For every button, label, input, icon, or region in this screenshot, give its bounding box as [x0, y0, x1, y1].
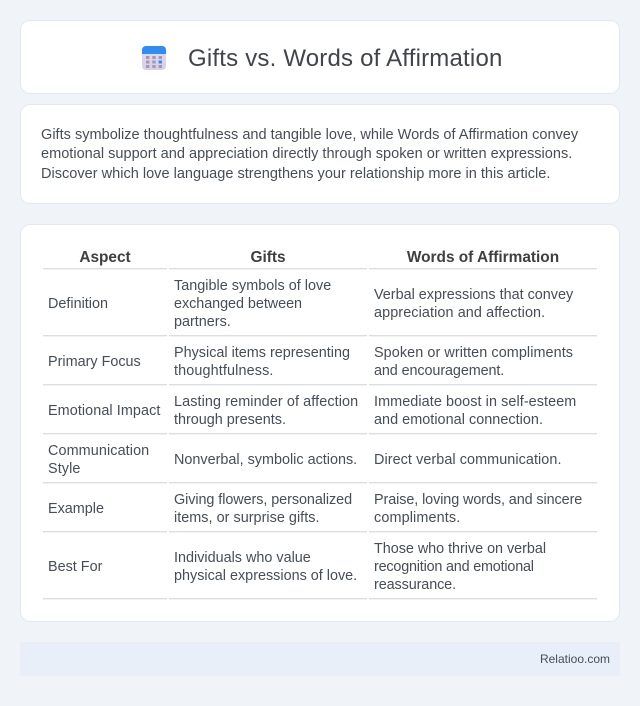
intro text	[41, 127, 578, 182]
row: primary focus: Physical items representing	[174, 345, 350, 361]
comparison table	[43, 249, 597, 600]
row: definition: appreciation and affection.	[374, 305, 545, 321]
row: best for: recognition and emotional	[374, 559, 534, 575]
row: best for: reassurance.	[374, 577, 456, 593]
row: communication style: Communication	[48, 443, 149, 459]
row: definition: Verbal expressions that convey	[374, 287, 573, 303]
header row	[43, 249, 597, 270]
row: communication style: Style	[48, 461, 80, 477]
row: best for	[43, 541, 597, 600]
row: emotional impact: Emotional Impact	[48, 403, 160, 419]
intro text: Gifts symbolize thoughtfulness and tangible love, while Words of Affirmation convey	[41, 127, 578, 143]
row: definition: exchanged between	[174, 296, 302, 312]
row: emotional impact: Immediate boost in self-esteem	[374, 394, 576, 410]
title: Gifts vs. Words of Affirmation	[188, 45, 503, 72]
header row: Words of Affirmation	[407, 249, 559, 266]
row: emotional impact: Lasting reminder of affection	[174, 394, 358, 410]
intro text: emotional support and appreciation directly through spoken or written expressions.	[41, 146, 572, 162]
row: primary focus: and encouragement.	[374, 363, 504, 379]
title card	[20, 20, 620, 94]
row: best for: Individuals who value	[174, 550, 311, 566]
row: example: Praise, loving words, and sincere	[374, 492, 582, 508]
row: emotional impact: through presents.	[174, 412, 286, 428]
row: definition: Tangible symbols of love	[174, 278, 331, 294]
table card	[20, 224, 620, 622]
row: primary focus: thoughtfulness.	[174, 363, 274, 379]
row: example: Giving flowers, personalized	[174, 492, 352, 508]
icon: calendar	[142, 46, 166, 70]
row: primary focus	[43, 345, 597, 386]
header row: Gifts	[250, 249, 286, 266]
row: communication style	[43, 443, 597, 484]
row: primary focus: Primary Focus	[48, 354, 141, 370]
row: example: compliments.	[374, 510, 460, 526]
row: best for: physical expressions of love.	[174, 568, 357, 584]
row: example: Example	[48, 501, 104, 517]
row: best for: Best For	[48, 559, 102, 575]
row: primary focus: Spoken or written compliments	[374, 345, 573, 361]
row: emotional impact: and emotional connection.	[374, 412, 543, 428]
row: example	[43, 492, 597, 533]
footer text: Relatioo.com	[540, 652, 610, 666]
row: communication style: Direct verbal communication.	[374, 452, 562, 468]
header row: Aspect	[79, 249, 131, 266]
footer bar	[20, 642, 620, 676]
intro text: Discover which love language strengthens your relationship more in this article.	[41, 166, 550, 182]
row: definition: Definition	[48, 296, 108, 312]
intro card	[20, 104, 620, 204]
row: communication style: Nonverbal, symbolic actions.	[174, 452, 357, 468]
row: emotional impact	[43, 394, 597, 435]
row: best for: Those who thrive on verbal	[374, 541, 546, 557]
row: definition	[43, 278, 597, 337]
row: definition: partners.	[174, 314, 231, 330]
row: example: items, or surprise gifts.	[174, 510, 320, 526]
